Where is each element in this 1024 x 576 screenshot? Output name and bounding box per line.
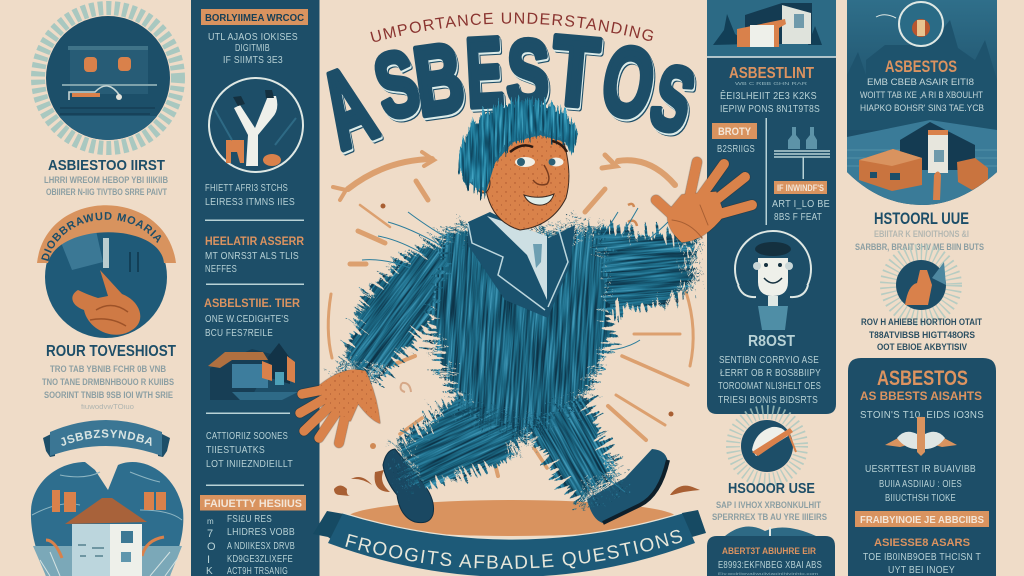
- section: asbestos tier: [204, 298, 301, 339]
- text block: TNO TANE DRMBNHBOUO R KUIIBS: [42, 377, 174, 388]
- title: ASBESTOS: A: [304, 43, 390, 172]
- text block: TIIESTUATKS: [206, 445, 265, 456]
- heading: historical use: HSTOORL UUE: [874, 210, 969, 228]
- title: ASBESTOS: T: [547, 15, 603, 128]
- heading: R8OST: [748, 333, 795, 350]
- text block: TOE IB0INB9OEB THCISN T: [863, 552, 981, 563]
- panel: middle right navy column: [707, 0, 836, 414]
- section: asbestos tier: ASBELSTIIE. TIER: [204, 298, 301, 310]
- text block: TRO TAB YBNIB FCHR 0B VNB: [50, 364, 166, 375]
- hair strands: [458, 100, 578, 197]
- text block: [718, 355, 821, 406]
- text block: STOIN'S T10, EIDS IO3NS: [860, 410, 984, 421]
- icon: emblem: [876, 2, 943, 46]
- text block: [720, 81, 820, 115]
- text block: SOORINT TNBIB 9SB IOI WTH SRIE: [44, 390, 173, 401]
- silhouette trees: [850, 20, 993, 72]
- text block: UESRTTEST IR BUAIVIBB: [865, 464, 976, 475]
- text block: IF SIIMTS 3E3: [223, 55, 283, 66]
- motion swooshes: [328, 152, 693, 476]
- illustration: house with workers: [31, 462, 183, 576]
- tag: brief: [712, 123, 757, 155]
- text block: TRIESI BONIS BIDSRTS: [718, 395, 818, 406]
- panel: bottom small: [707, 527, 835, 576]
- panel: bottom small: E8993:EKFNBEG XBAI ABS: [718, 560, 822, 571]
- section: asbestos tier: ONE W.CEDIGHTE'S: [205, 314, 289, 325]
- text block: SPERRREX TB AU YRE IIIEIRS: [712, 512, 827, 523]
- heading: HSOOOR USE: [728, 480, 815, 497]
- list: O: [207, 541, 216, 553]
- text block: EMB CBEB ASAIR EITI8: [867, 77, 974, 88]
- title: ASBESTOS: [304, 15, 705, 172]
- text block: [855, 229, 984, 253]
- text block: [205, 183, 295, 208]
- tag: 8BS F FEAT: [774, 212, 822, 223]
- header bar: FRAIBYINOIE JE ABBCIIBS: [860, 514, 984, 526]
- title: ASBESTOS: B: [408, 21, 470, 137]
- heading: tour: ROUR TOVESHIOST: [46, 343, 176, 360]
- text block: WOITT TAB IXE ,A RI B XBOULHT: [860, 90, 983, 101]
- panel: right column top: [847, 0, 997, 205]
- left hand: [300, 371, 379, 443]
- heading: ASBESTOS: [877, 367, 968, 390]
- text block: SENTIBN CORRYIO ASE: [719, 355, 819, 366]
- text block: LHRRI WREOM HEBOP YBI IIIKIIB: [44, 175, 168, 186]
- text block: fiuwodvwTOiuo: [81, 404, 134, 411]
- panel: right column bottom: [848, 358, 996, 576]
- illustration: top buildings: [707, 0, 836, 58]
- suit jacket: [468, 212, 575, 318]
- section: health: HEELATIR ASSERR: [205, 236, 305, 248]
- icon: sun medallion: [888, 252, 954, 318]
- tag: brief: BROTY: [718, 126, 752, 138]
- illustration: buildings: [847, 120, 997, 205]
- panel: bottom small: Eiv.wolrliwvaliwuliviaoinlhivinhto.com: [718, 571, 819, 576]
- illustration: house: [208, 343, 298, 400]
- text block: [863, 552, 981, 576]
- title: ASBESTOS: O: [594, 24, 662, 141]
- text block: [860, 78, 984, 111]
- icon: arched banner medallion: DIOBBRAWUD MOARIA: [41, 212, 162, 262]
- text block: [712, 500, 827, 523]
- text block: TOROOMAT NLI3HELT OES: [718, 381, 821, 392]
- eyes and brows: [510, 141, 567, 152]
- text block: BUIIA ASDIIAU : OIES: [879, 479, 962, 490]
- ribbon banner: JSBBZSYNDBA: [61, 429, 152, 446]
- loose fur strands: [362, 208, 712, 492]
- header bar: BORLYIIMEA WRCOC: [205, 12, 304, 24]
- subheading: AS BBESTS AISAHTS: [860, 389, 982, 403]
- icon: figure in circle: [209, 78, 303, 172]
- title: kicker: UMPORTANCE UNDERSTANDING: [370, 12, 654, 42]
- ground ellipse: [347, 500, 677, 536]
- section: health: MT ONRS3T ALS TLIS: [205, 251, 299, 262]
- heading: ASBESTOS: [885, 58, 957, 76]
- panel: bottom small: ABERT3T ABIUHRE EIR: [722, 546, 816, 557]
- section: indoor use: [712, 412, 827, 523]
- text block: UTL AJAOS IOKISES: [208, 32, 298, 43]
- tag: brief: B2SRIIGS: [717, 144, 755, 155]
- nose and mouth: [533, 165, 549, 185]
- text block: EBIITAR K ENIOITHONS &I: [874, 229, 969, 240]
- character: [270, 100, 752, 547]
- list: LHIDRES VOBB: [227, 527, 295, 538]
- text block: UYT BEI INOEY: [888, 565, 955, 576]
- icon: winged fibre: [885, 417, 957, 456]
- title: ASBESTOS: S: [640, 45, 705, 154]
- ribbon banner: [43, 420, 170, 457]
- text block: IEPIW PONS 8N1T9T8S: [720, 104, 820, 115]
- text block: OBIIRER N-IIG TIVTBO SRRE PAIVT: [46, 187, 167, 198]
- tag: [772, 181, 830, 223]
- tag: ART I_LO BE: [772, 199, 830, 210]
- text block: FHIETT AFRI3 STCHS: [205, 183, 288, 194]
- text block: HIAPKO BOHSR' SIN3 TAE.YCB: [860, 103, 984, 114]
- icon: cartoon portrait: [730, 231, 816, 330]
- text block: LEIRES3 ITMNS IIES: [205, 197, 295, 208]
- heading: asbestos first: ASBIESTOO IIRST: [48, 157, 165, 174]
- icon: medallion with rays: [733, 412, 801, 480]
- text block: DIGITMIB: [235, 43, 270, 54]
- hair base: [462, 104, 575, 192]
- section: asbestos tier: BCU FES7REILE: [205, 328, 273, 339]
- section: health: [205, 236, 305, 275]
- title: ASBESTOS: E: [463, 16, 506, 128]
- text block: SARBBR, BRAIT 3HV ME BIIN BUTS: [855, 242, 984, 253]
- list: FSI£U RES: [227, 514, 272, 525]
- list: I: [207, 554, 210, 566]
- text block: SAP I IVHOX XRBONKULHIT: [716, 500, 821, 511]
- text block: [42, 364, 174, 411]
- list: m: [207, 517, 214, 526]
- text block: [206, 431, 293, 470]
- text block: ROV H AHIEBE HORTIOH OTAIT: [861, 317, 982, 327]
- heading: ASBESTLINT: [729, 65, 814, 82]
- header bar: [855, 511, 989, 527]
- subheading: ASIESSE8 ASARS: [874, 537, 970, 549]
- ribbon: frequently asked questions: FROOGITS AFBADLE QUESTIONS: [345, 530, 682, 569]
- text block: T88ATVIBSB HIGTT48ORS: [869, 330, 975, 340]
- text block: BIIUCTHSH TIOKE: [885, 493, 956, 504]
- icon: bottles on shelf: [774, 127, 830, 179]
- tag: IF INWINDF'S: [777, 183, 824, 193]
- text block: WB C RBB GHN RAR: [735, 81, 808, 86]
- header bar: [201, 9, 308, 25]
- text block: [861, 317, 982, 352]
- list: 7: [207, 528, 213, 540]
- list: A NDIIKESX DRVB: [227, 541, 295, 552]
- left column: [30, 1, 185, 576]
- dots: [334, 204, 700, 496]
- text block: ŁERRT OB R BOS8BIIPY: [720, 368, 821, 379]
- text block: [208, 32, 298, 66]
- head: [458, 100, 578, 230]
- ribbon: frequently asked questions: [320, 510, 706, 576]
- title: ASBESTOS: S: [365, 31, 429, 140]
- furry body: [270, 159, 705, 547]
- header bar: FAIUETTY HESIIUS: [204, 498, 302, 510]
- boots: [383, 449, 668, 523]
- text block: OOT EBIOE AKBYTISIV: [877, 342, 967, 352]
- panel: left navy column: [191, 0, 320, 576]
- text block: LOT INIIEZNDIEILLT: [206, 459, 293, 470]
- list: KD9GE3ZLIXEFE: [227, 554, 293, 565]
- text block: CATTIORIIZ SOONES: [206, 431, 288, 442]
- title: ASBESTOS: S: [506, 21, 550, 127]
- right hand: [656, 162, 752, 242]
- text block: [865, 464, 976, 504]
- text block: [44, 175, 168, 198]
- icon: furnace medallion: [38, 8, 178, 148]
- list: [206, 514, 295, 576]
- icon: arched banner medallion: [37, 205, 176, 338]
- section: health: NEFFES: [205, 264, 237, 275]
- text block: ÊEI3LHEIIT 2E3 K2KS: [720, 89, 817, 102]
